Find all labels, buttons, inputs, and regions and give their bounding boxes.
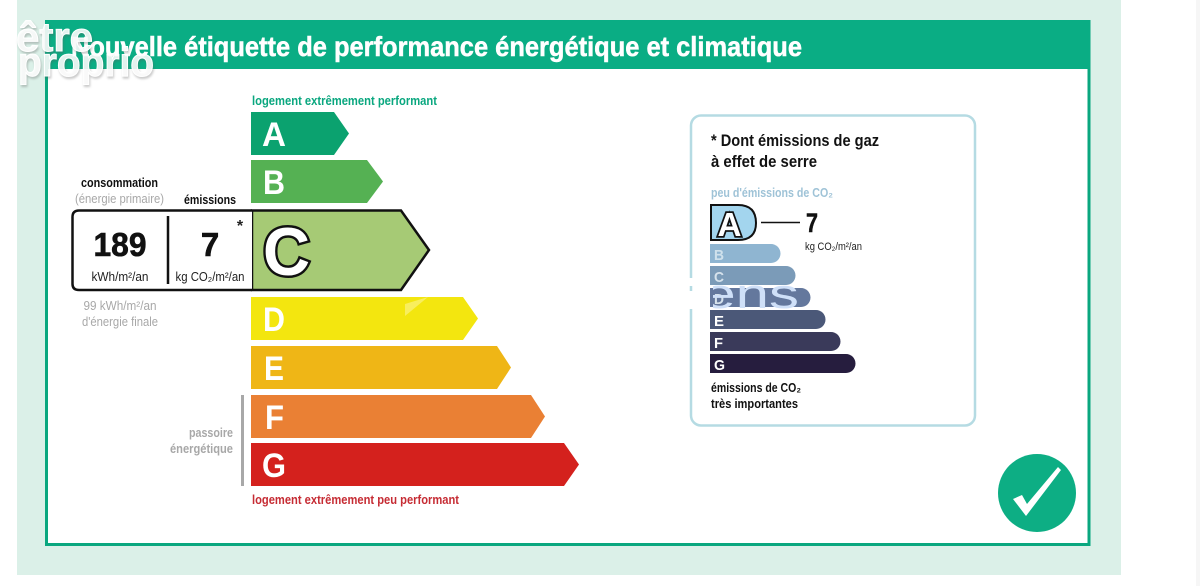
climate class F: F [714,335,723,352]
climate class G [710,354,856,374]
asterisk: * [237,218,244,235]
top scale caption: logement extrêmement performant [252,93,438,108]
climate value connector [761,222,800,224]
energy class F [251,395,545,438]
climate class D: D [714,291,724,308]
climate class C: C [714,269,724,286]
high emissions caption: émissions de CO₂ [711,380,801,395]
energy class B [251,160,383,203]
low emissions caption: peu d'émissions de CO₂ [711,185,833,200]
final energy note: 99 kWh/m²/an [84,299,157,313]
panel heading: à effet de serre [711,152,817,171]
high emissions caption: très importantes [711,396,798,411]
energy class E [251,346,511,389]
title banner: Nouvelle étiquette de performance énergétique et climatique [71,31,802,62]
emissions value: 7 [201,226,219,263]
bottom scale caption: logement extrêmement peu performant [252,492,460,507]
consumption value: 189 [94,226,146,263]
climate value: 7 [806,208,818,238]
climate class E: E [714,313,724,330]
consumption unit: kWh/m²/an [92,270,149,284]
icon: check mark [998,454,1076,532]
watermark logo: proprio [18,39,154,85]
climate class B [710,244,780,264]
emissions unit: kg CO₂/m²/an [176,270,245,284]
energy class B: B [263,164,285,202]
panel: greenhouse gas emissions [691,116,975,426]
watermark fragment [690,278,797,309]
climate unit: kg CO₂/m²/an [805,241,862,253]
energy class D [251,297,478,340]
watermark fragment: iens [689,270,799,317]
energy sieve label: passoire [189,426,233,440]
climate class C [710,266,796,286]
climate class A, current rating: A [718,206,742,243]
energy sieve label: énergétique [170,442,233,456]
title banner [45,20,1090,69]
primary energy note: (énergie primaire) [75,192,164,206]
values box [72,210,252,290]
energy class G: G [262,447,286,485]
high emissions caption [711,380,801,411]
energy class A [251,112,349,155]
climate class E [710,310,826,330]
energy class C, current rating [252,210,429,290]
energy class C, current rating: C [263,214,310,290]
climate class F [710,332,840,352]
final energy note: d'énergie finale [82,315,158,329]
consumption heading: consommation [81,176,158,190]
emissions heading: émissions [184,193,236,207]
climate class G: G [714,357,725,374]
panel heading [711,131,879,171]
energy sieve label [170,395,244,486]
energy class A: A [262,116,286,154]
panel heading: * Dont émissions de gaz [711,131,879,150]
climate class A, current rating [711,205,756,243]
energy class F: F [265,399,284,437]
energy class G [251,443,579,486]
energy class E: E [264,350,284,388]
watermark logo: être [16,14,93,60]
label frame [46,22,1089,544]
final energy note [82,299,158,329]
climate class D [710,288,810,308]
energy class D: D [263,301,285,339]
climate class B: B [714,247,724,264]
watermark logo [16,14,154,85]
